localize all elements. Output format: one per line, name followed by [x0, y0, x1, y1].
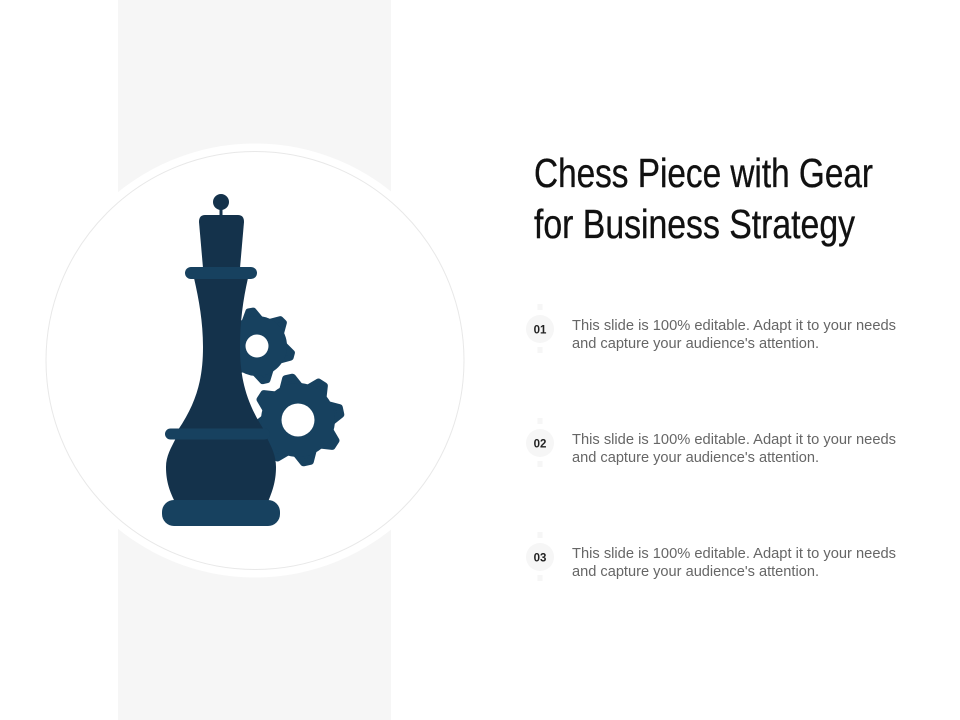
item 03 — [526, 532, 896, 581]
item 03: This slide is 100% editable. Adapt it to your needs — [572, 546, 896, 562]
title: Chess Piece with Gear — [534, 150, 873, 196]
title — [534, 150, 873, 247]
chess lower body — [166, 438, 276, 502]
item 02: This slide is 100% editable. Adapt it to your needs — [572, 432, 896, 448]
upper collar — [185, 267, 257, 279]
item 02 — [526, 418, 896, 467]
background band — [118, 0, 391, 720]
base — [162, 500, 280, 526]
icon: gears — [221, 310, 342, 464]
item 03: 03 — [534, 552, 546, 564]
circle panel — [38, 144, 472, 578]
icon: large gear — [254, 376, 342, 464]
item 01: and capture your audience's attention. — [572, 336, 819, 352]
item 02: and capture your audience's attention. — [572, 450, 819, 466]
item 01: This slide is 100% editable. Adapt it to your needs — [572, 318, 896, 334]
lower collar — [165, 428, 270, 440]
item 01 — [526, 304, 896, 353]
item 02: 02 — [534, 438, 546, 450]
icon: chess piece — [162, 194, 280, 526]
title: for Business Strategy — [534, 201, 855, 247]
chess ball finial — [213, 194, 229, 210]
item 01: 01 — [534, 324, 547, 336]
chess neck — [178, 278, 264, 430]
icon: small gear — [221, 310, 293, 382]
chess crown — [199, 215, 244, 268]
item 03: and capture your audience's attention. — [572, 564, 819, 580]
